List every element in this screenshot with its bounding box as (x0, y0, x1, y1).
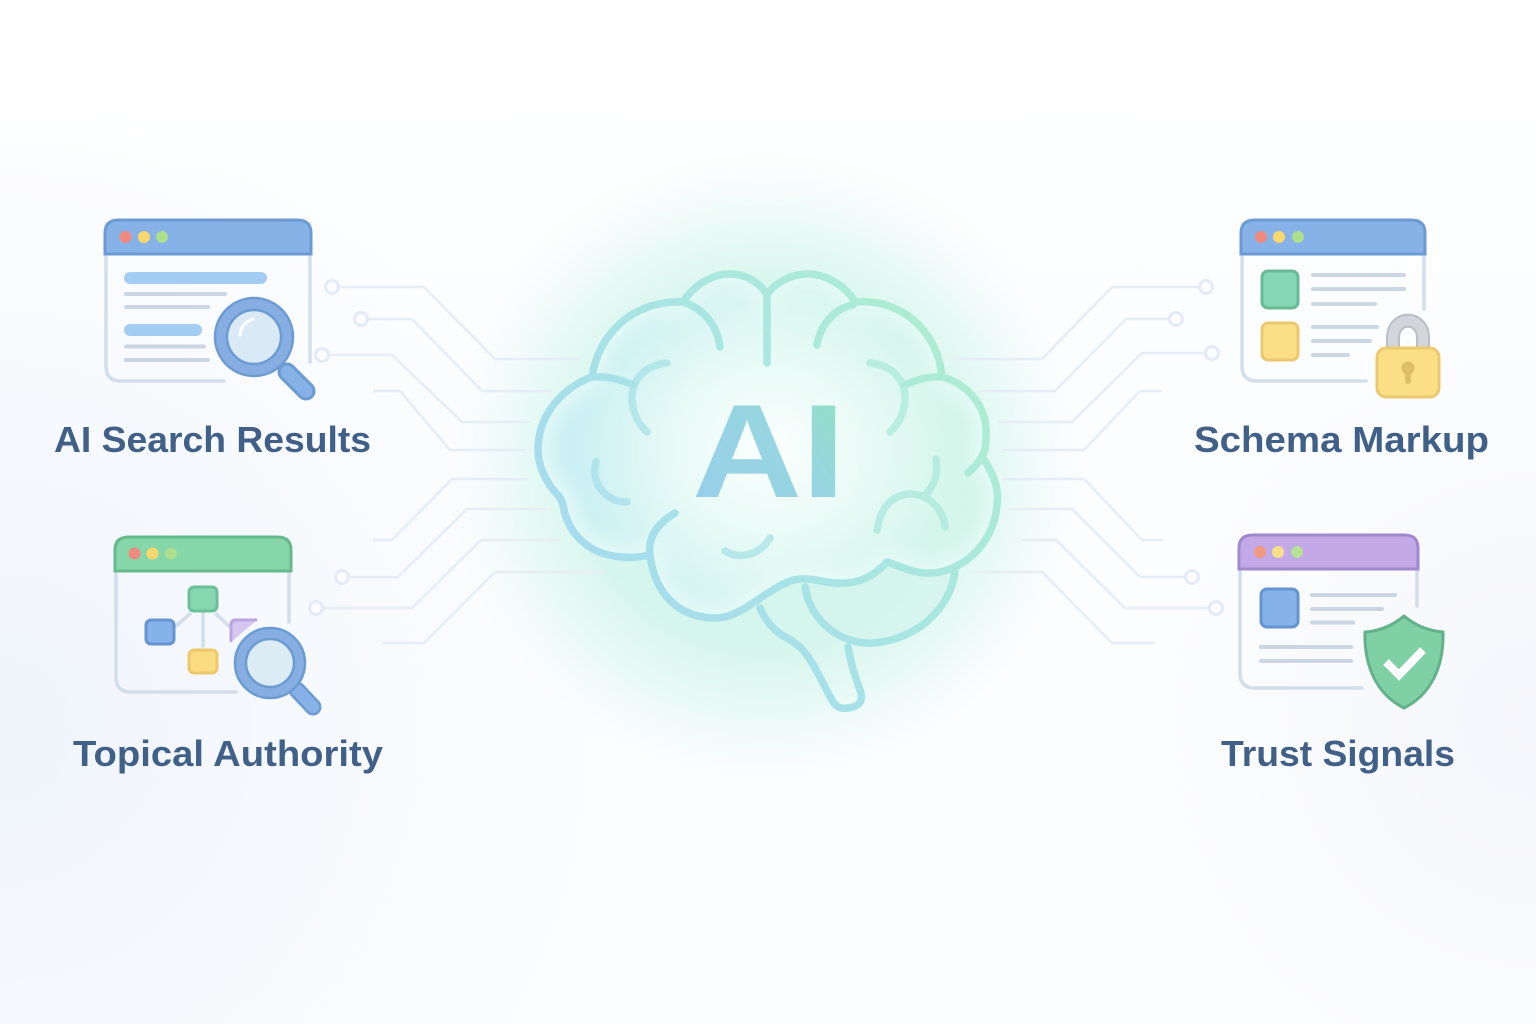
label: Topical Authority: Topical Authority (73, 733, 383, 774)
magnifier (215, 298, 306, 391)
brain inner edge light (538, 274, 997, 618)
icon: AI search results window (105, 220, 311, 391)
brain folds (592, 295, 982, 555)
circuit lines: left (310, 280, 605, 643)
magnifier (235, 628, 313, 707)
brain fill (538, 274, 997, 618)
icon: schema markup window (1241, 220, 1439, 397)
central glow (435, 145, 1095, 795)
cerebellum fill (805, 562, 955, 643)
icon: topical authority window (115, 537, 313, 707)
AI text: A (692, 378, 802, 526)
label: Trust Signals: Trust Signals (1221, 733, 1455, 774)
AI text: I (801, 378, 846, 526)
label: AI Search Results: AI Search Results (54, 419, 371, 460)
label: Schema Markup: Schema Markup (1194, 419, 1489, 460)
AI text (692, 378, 846, 526)
icon: trust signals window (1239, 535, 1443, 708)
cerebellum and stem (760, 572, 955, 708)
brain (538, 274, 997, 708)
lock (1377, 321, 1439, 397)
brain core highlight (616, 324, 913, 574)
brain outline (538, 274, 997, 618)
shield (1365, 616, 1443, 708)
circuit lines: right (955, 280, 1222, 643)
